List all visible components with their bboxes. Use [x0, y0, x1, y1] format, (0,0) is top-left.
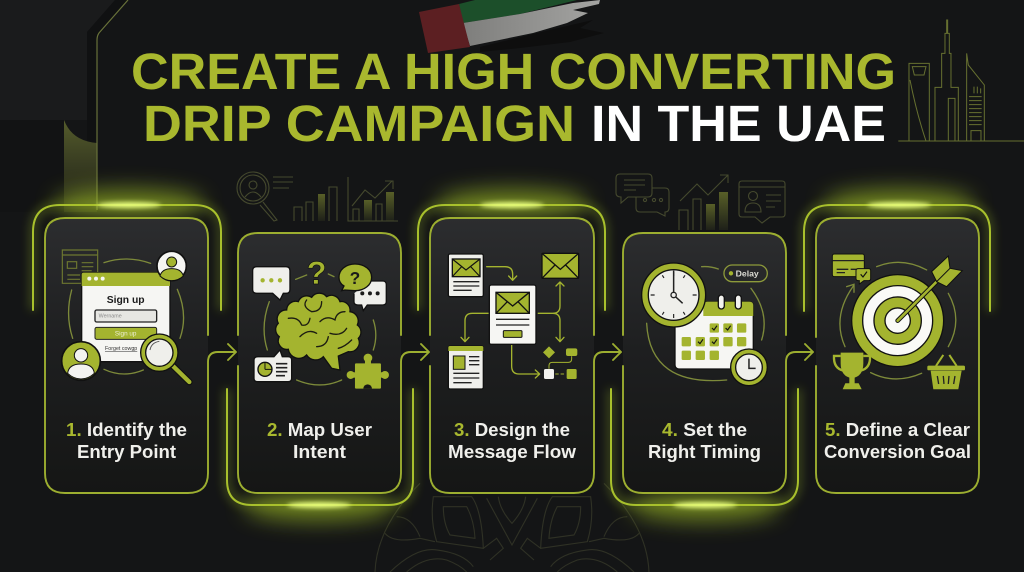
- faint analytics icons left: [237, 172, 398, 221]
- icon: clock and calendar: [642, 263, 767, 386]
- icon: sign up form with users: [62, 250, 189, 382]
- title: [131, 43, 896, 152]
- label: step 5: [824, 419, 971, 462]
- icon: sign up form with users: Sign up: [115, 330, 137, 337]
- label: step 2: 2. Map User: [267, 419, 372, 440]
- icon: brain with questions: [253, 254, 389, 389]
- title: IN THE UAE: [591, 95, 886, 152]
- label: step 4: Right Timing: [648, 441, 761, 462]
- icon: sign up form with users: Wername: [99, 314, 122, 320]
- label: step 5: 5. Define a Clear: [825, 419, 970, 440]
- label: step 2: Intent: [293, 441, 346, 462]
- icon: target with arrow: [832, 254, 965, 389]
- label: step 1: 1. Identify the: [66, 419, 187, 440]
- panel: step 5 define a clear conversion goal: [804, 189, 990, 493]
- panel: step 2 map user intent: [227, 233, 429, 521]
- panel: step 4 set the right timing: [611, 233, 813, 521]
- label: step 3: [448, 419, 577, 462]
- icon: sign up form with users: Sign up: [107, 295, 145, 306]
- skyline illustration: [898, 20, 1024, 141]
- icon: sign up form with users: Forget cowgp: [105, 346, 137, 352]
- faint analytics icons right: [616, 174, 785, 230]
- panel: step 1 identify the entry point: [33, 189, 236, 493]
- label: step 2: [267, 419, 372, 462]
- title: CREATE A HIGH CONVERTING: [131, 43, 896, 100]
- icon: message flow diagram: [448, 253, 579, 389]
- label: step 5: Conversion Goal: [824, 441, 971, 462]
- label: step 3: Message Flow: [448, 441, 577, 462]
- icon: clock and calendar: Delay: [736, 269, 759, 279]
- label: step 4: [648, 419, 761, 462]
- label: step 4: 4. Set the: [662, 419, 747, 440]
- label: step 1: Entry Point: [77, 441, 176, 462]
- flag of the UAE: [419, 0, 604, 53]
- label: step 1: [66, 419, 187, 462]
- left corner decoration: [0, 0, 128, 212]
- icon: brain with questions: ?: [307, 254, 327, 291]
- label: step 3: 3. Design the: [454, 419, 570, 440]
- panel: step 3 design the message flow: [418, 189, 621, 493]
- icon: brain with questions: ?: [350, 268, 360, 288]
- title: DRIP CAMPAIGN: [143, 95, 575, 152]
- bottom arabesque pattern: [375, 483, 649, 572]
